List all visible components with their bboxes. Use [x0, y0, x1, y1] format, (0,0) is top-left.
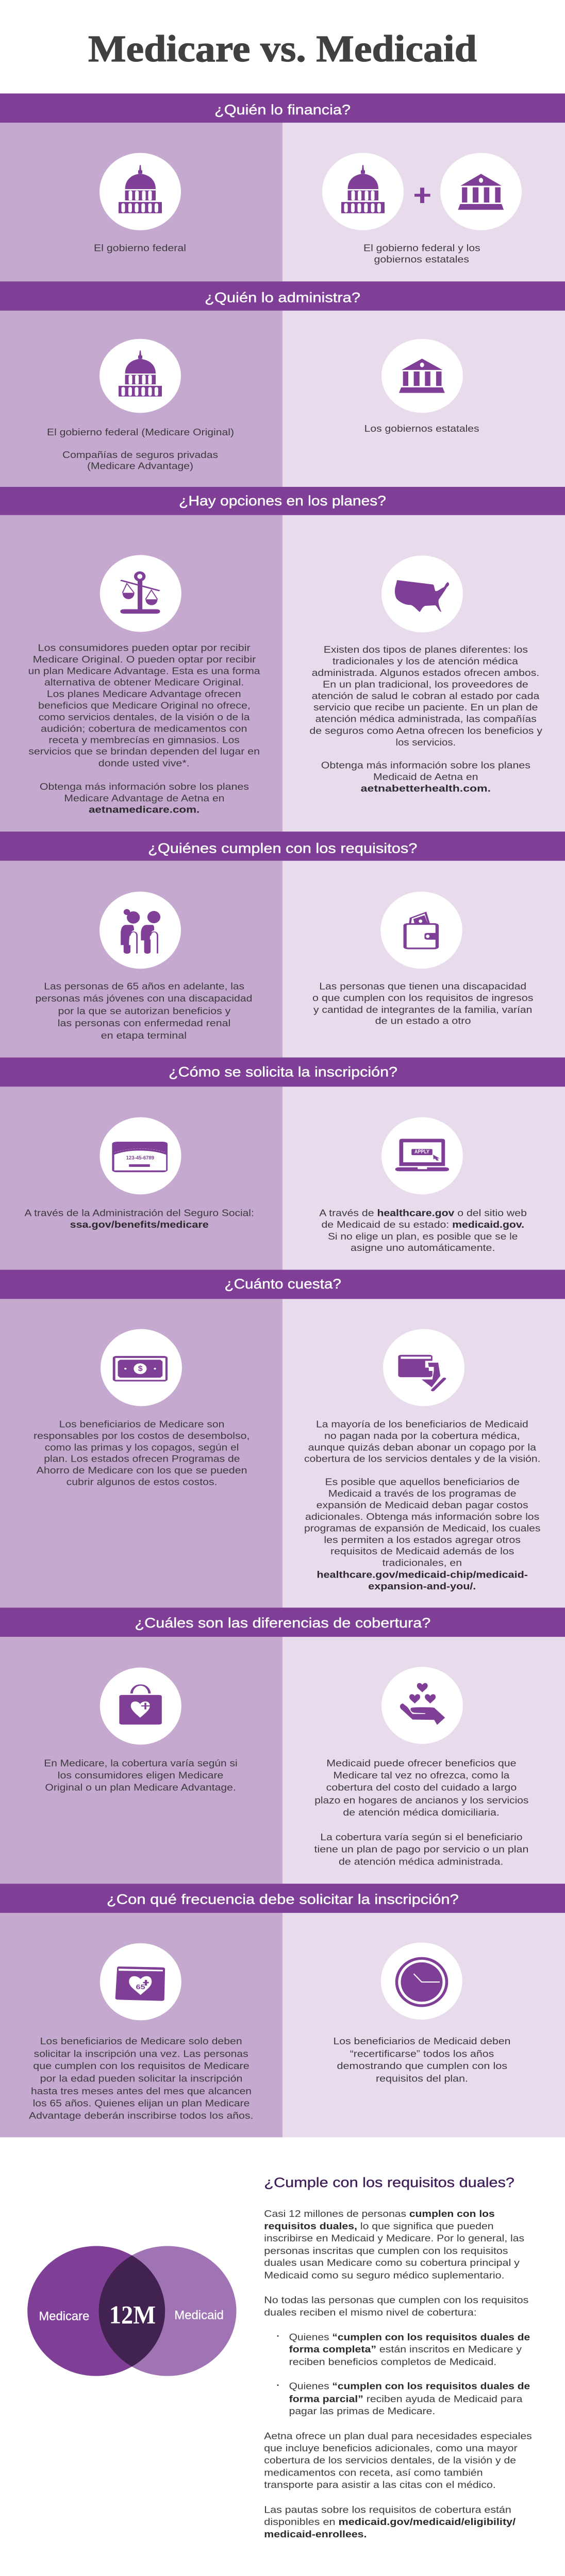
panel: Medicaid enrollment frequency: [282, 1913, 565, 2138]
chart: Venn diagram of dual eligibility: Medicare: [39, 2310, 89, 2324]
panel: Medicare enrollment: [0, 1087, 282, 1270]
text: Medicare coverage description: Original o un plan Medicare Advantage.: [45, 1783, 236, 1793]
panel: Medicaid eligibility: [282, 861, 565, 1058]
icon: wallet in hand: [383, 1329, 464, 1406]
text: Medicaid frequency description: Los beneficiarios de Medicaid deben: [333, 2037, 510, 2047]
text: Medicare eligibility description: por la que se autorizan beneficios y: [58, 1006, 231, 1016]
heading bar: ¿Cuáles son las diferencias de cobertura?: [135, 1615, 430, 1631]
text: Medicaid plan options description: de seguros como Aetna ofrecen los beneficios y: [309, 726, 543, 736]
icon: capitol on right: [322, 153, 404, 230]
text: Medicare enrollment description: ssa.gov/benefits/medicare: [70, 1219, 209, 1230]
text: Medicaid cost description: La mayoría de los beneficiarios de Medicaid: [316, 1419, 528, 1430]
heading bar: ¿Con qué frecuencia debe solicitar la inscripción?: [107, 1891, 459, 1907]
text: Medicare frequency description: que cumplen con los requisitos de Medicare: [33, 2061, 250, 2072]
icon: United States map: [381, 555, 463, 633]
text: dual eligibility body: [264, 2209, 532, 2540]
text: Medicaid plan options description: administrada. Algunos estados ofrecen ambos.: [312, 668, 539, 679]
icon: capitol: [99, 153, 181, 230]
section: ¿Cuánto cuesta?: [0, 1270, 565, 1607]
text: dual eligibility body: disponibles en medicaid.gov/medicaid/eligibility/: [264, 2517, 516, 2528]
text: federal and state governments: [363, 243, 480, 265]
text: Medicare cost description: [34, 1419, 250, 1487]
text: Medicare eligibility description: las personas con enfermedad renal: [58, 1019, 230, 1029]
text: Medicaid plan options description: Obtenga más información sobre los planes: [321, 760, 530, 771]
heading bar: [0, 1058, 565, 1087]
text: dual eligibility body: que incluye beneficios adicionales, como una mayor: [264, 2443, 518, 2454]
section: ¿Quién lo administra?: [0, 281, 565, 487]
text: Medicare cost description: cubrir algunos de estos costos.: [67, 1477, 217, 1487]
text: Medicaid coverage description: tiene un plan de pago por servicio o un plan: [314, 1844, 528, 1855]
text: Medicare frequency description: Advantage deberán inscribirse todos los años.: [29, 2111, 253, 2121]
text: Medicaid cost description: requisitos de Medicaid además de los: [330, 1547, 514, 1557]
icon: balance scale: [100, 555, 181, 632]
panel: Medicaid plan options: [282, 515, 565, 832]
icon: dollar bill: [101, 1329, 182, 1406]
text: who administers Medicare: [47, 427, 234, 471]
text: Medicare plan options description: beneficios que Medicare Original no ofrece,: [38, 701, 251, 711]
text: Medicare cost description: responsables por los costos de desembolso,: [34, 1431, 250, 1442]
text: Medicare plan options description: como servicios dentales, de la visión o de la: [39, 712, 250, 723]
text: Medicaid cost description: expansion-and-you/.: [368, 1581, 476, 1592]
heading bar: ¿Cómo se solicita la inscripción?: [169, 1064, 397, 1079]
icon: clock: [381, 1942, 462, 2020]
text: Medicaid enrollment description: asigne uno automáticamente.: [351, 1243, 495, 1253]
text: Medicaid enrollment description: Si no elige un plan, es posible que se le: [328, 1231, 518, 1242]
text: Medicaid coverage description: [314, 1758, 528, 1867]
text: state governments: Los gobiernos estatales: [364, 424, 479, 434]
panel: Medicare plan options: [0, 515, 282, 832]
icon: laptop with apply button: APPLY: [414, 1149, 429, 1155]
section: ¿Con qué frecuencia debe solicitar la inscripción?: [0, 1884, 565, 2138]
text: Medicaid plan options description: servicio que recibe un paciente. En un plan de: [313, 703, 538, 713]
heading bar: ¿Hay opciones en los planes?: [179, 493, 386, 509]
text: Medicaid cost description: no pagan nada por la cobertura médica,: [324, 1431, 520, 1442]
icon: state building: [440, 153, 522, 230]
chart: Venn diagram of dual eligibility: Medicaid: [174, 2309, 224, 2322]
panel: Medicare administration: [0, 311, 282, 487]
text: Medicaid plan options description: Existen dos tipos de planes diferentes: los: [324, 645, 528, 655]
text: Medicare eligibility description: en etapa terminal: [101, 1030, 187, 1041]
bullet: full dual eligibility: forma completa” están inscritos en Medicare y: [289, 2345, 522, 2355]
text: Medicaid cost description: Es posible que aquellos beneficiarios de: [325, 1477, 520, 1487]
icon: medical bag: [100, 1668, 181, 1744]
section: ¿Cómo se solicita la inscripción?: [0, 1058, 565, 1270]
icon: dollar bill: $: [138, 1364, 143, 1373]
section: ¿Quién lo financia?: [0, 93, 565, 281]
panel: Medicaid financing: [282, 123, 565, 281]
text: federal government: El gobierno federal: [94, 243, 186, 253]
heading bar: [0, 281, 565, 311]
text: dual eligibility body: Medicaid como su seguro médico suplementario.: [264, 2270, 504, 2281]
text: Medicare plan options description: audición; cobertura de medicamentos con: [41, 724, 247, 734]
text: Medicaid cost description: aunque quizás deban abonar un copago por la: [308, 1443, 537, 1453]
text: dual eligibility body: medicaid-enrollees.: [264, 2529, 367, 2540]
text: Medicaid plan options description: En un plan tradicional, los proveedores de: [323, 680, 528, 690]
icon: older couple: [99, 892, 181, 969]
text: Medicare frequency description: [29, 2037, 253, 2121]
text: Medicaid coverage description: plazo en hogares de ancianos y los servicios: [314, 1795, 528, 1806]
heading bar: ¿Quién lo financia?: [214, 102, 351, 117]
text: dual eligibility body: duales usan Medicare como su cobertura principal y: [264, 2258, 520, 2268]
text: Medicaid eligibility description: Las personas que tienen una discapacidad: [319, 981, 526, 992]
text: Medicaid enrollment description: de Medicaid de su estado: medicaid.gov.: [322, 1219, 524, 1230]
icon: wallet with bills: [380, 892, 462, 969]
text: federal and state governments: El gobierno federal y los: [363, 243, 480, 253]
chart: Venn diagram of dual eligibility: [27, 2246, 236, 2376]
text: federal and state governments: gobiernos estatales: [374, 255, 469, 265]
text: Medicaid eligibility description: o que cumplen con los requisitos de ingresos: [312, 993, 533, 1004]
section: ¿Hay opciones en los planes?: [0, 487, 565, 832]
icon: state building: [381, 339, 463, 413]
text: dual eligibility body: Las pautas sobre los requisitos de cobertura están: [264, 2505, 511, 2515]
panel: Medicare financing: [0, 123, 282, 281]
text: Medicaid cost description: adicionales. Obtenga más información sobre los: [305, 1512, 539, 1522]
text: Medicare eligibility description: Las personas de 65 años en adelante, las: [44, 981, 244, 992]
text: Medicaid cost description: expansión de Medicaid deban pagar costos: [317, 1500, 528, 1511]
text: Medicaid enrollment description: A través de healthcare.gov o del sitio web: [319, 1208, 527, 1218]
text: Medicaid coverage description: cobertura del costo del cuidado a largo: [326, 1783, 517, 1793]
text: dual eligibility body: requisitos duales, lo que significa que pueden: [264, 2221, 494, 2232]
text: Medicaid cost description: les permiten a los estados agregar otros: [324, 1535, 521, 1546]
text: Medicare enrollment description: [24, 1208, 254, 1230]
text: Medicaid coverage description: de atención médica domiciliaria.: [343, 1807, 500, 1818]
text: Medicaid coverage description: Medicaid puede ofrecer beneficios que: [326, 1758, 517, 1769]
panel: Medicaid enrollment: [282, 1087, 565, 1270]
text: dual eligibility body: duales reciben el mismo nivel de cobertura:: [264, 2308, 477, 2318]
title: Medicare vs. Medicaid: [88, 28, 477, 70]
panel: Medicare coverage: [0, 1637, 282, 1884]
text: Medicaid plan options description: Medicaid de Aetna en: [373, 772, 478, 783]
text: Medicaid plan options description: [309, 645, 543, 794]
text: Medicaid cost description: tradicionales, en: [383, 1558, 462, 1569]
text: Medicare plan options description: Los planes Medicare Advantage ofrecen: [47, 689, 241, 700]
text: Medicaid coverage description: Medicare tal vez no ofrezca, como la: [333, 1771, 510, 1781]
icon: laptop with apply button: [381, 1117, 463, 1194]
text: Medicaid coverage description: La cobertura varía según si el beneficiario: [320, 1832, 522, 1843]
text: Medicare frequency description: Los beneficiarios de Medicare solo deben: [40, 2037, 242, 2047]
heading bar: ¿Quiénes cumplen con los requisitos?: [148, 840, 417, 856]
text: Medicaid eligibility description: [312, 981, 533, 1027]
text: Medicare cost description: Los beneficiarios de Medicare son: [59, 1419, 224, 1430]
text: Medicare eligibility description: [35, 981, 252, 1041]
icon: calendar with heart 65+: [100, 1943, 181, 2020]
text: dual eligibility body: personas inscritas que cumplen con los requisitos: [264, 2246, 508, 2257]
text: Medicaid eligibility description: y cantidad de integrantes de la familia, varían: [313, 1005, 532, 1015]
bullet: partial dual eligibility: forma parcial” reciben ayuda de Medicaid para: [289, 2394, 523, 2404]
text: Medicaid cost description: healthcare.gov/medicaid-chip/medicaid-: [317, 1570, 528, 1580]
text: Medicare eligibility description: personas más jóvenes con una discapacidad: [35, 993, 252, 1004]
text: Medicaid cost description: cobertura de los servicios dentales y de la visión.: [304, 1454, 540, 1464]
bullet: partial dual eligibility: [277, 2381, 530, 2417]
text: Medicaid frequency description: [333, 2037, 510, 2084]
text: Medicaid plan options description: atención médica administrada, las compañías: [315, 714, 537, 724]
text: Medicare frequency description: solicitar la inscripción una vez. Las personas: [34, 2049, 248, 2059]
text: Medicare plan options description: alternativa de obtener Medicare Original.: [44, 677, 244, 688]
icon: calendar with heart 65+: 65: [136, 1983, 145, 1991]
heading bar: [0, 1607, 565, 1637]
heading bar: [0, 832, 565, 861]
text: dual eligibility body: Aetna ofrece un plan dual para necesidades especiales: [264, 2431, 532, 2442]
text: Medicare plan options description: aetnamedicare.com.: [89, 805, 200, 816]
chart: Venn diagram of dual eligibility: 12M: [109, 2301, 156, 2329]
icon: plus sign: [414, 188, 430, 203]
bullet: partial dual eligibility: pagar las primas de Medicare.: [289, 2406, 435, 2417]
text: dual eligibility body: transporte para asistir a las citas con el médico.: [264, 2480, 496, 2490]
text: Medicare plan options description: Medicare Advantage de Aetna en: [64, 793, 225, 804]
panel: Medicare cost: [0, 1299, 282, 1607]
text: dual eligibility body: No todas las personas que cumplen con los requisitos: [264, 2295, 528, 2306]
bullet: partial dual eligibility: Quienes “cumplen con los requisitos duales de: [289, 2381, 530, 2392]
text: Medicare coverage description: [44, 1758, 238, 1793]
text: dual eligibility body: cobertura de los servicios dentales, de la visión y de: [264, 2455, 516, 2466]
section: ¿Quiénes cumplen con los requisitos?: [0, 832, 565, 1058]
heading bar: ¿Quién lo administra?: [205, 290, 360, 305]
text: Medicare enrollment description: A través de la Administración del Seguro Social:: [24, 1208, 254, 1218]
text: dual eligibility body: medicamentos con receta, así como también: [264, 2468, 483, 2478]
bullet: full dual eligibility: reciben beneficios completos de Medicaid.: [289, 2357, 496, 2367]
text: dual eligibility body: Casi 12 millones de personas cumplen con los: [264, 2209, 495, 2219]
heading bar: [0, 1270, 565, 1299]
text: Medicaid frequency description: demostrando que cumplen con los: [337, 2061, 507, 2072]
heading: dual eligibility: ¿Cumple con los requisitos duales?: [264, 2175, 514, 2190]
text: Medicare plan options description: receta y membrecías en gimnasios. Los: [48, 735, 240, 745]
text: Medicaid frequency description: “recertificarse” todos los años: [350, 2049, 494, 2059]
bullet: full dual eligibility: [277, 2332, 530, 2367]
section: ¿Cuáles son las diferencias de cobertura?: [0, 1607, 565, 1884]
text: who administers Medicare: (Medicare Advantage): [87, 461, 193, 471]
text: Medicaid cost description: Medicaid a través de los programas de: [328, 1489, 517, 1499]
heading bar: ¿Cuánto cuesta?: [224, 1276, 341, 1292]
panel: Medicaid cost: [282, 1299, 565, 1607]
text: who administers Medicare: El gobierno federal (Medicare Original): [47, 427, 234, 438]
text: Medicare frequency description: hasta tres meses antes del mes que alcancen: [31, 2086, 252, 2097]
text: Medicare plan options description: Los consumidores pueden optar por recibir: [38, 643, 251, 653]
text: Medicare coverage description: En Medicare, la cobertura varía según si: [44, 1758, 238, 1769]
text: Medicaid plan options description: los servicios.: [395, 737, 456, 748]
text: Medicare plan options description: Obtenga más información sobre los planes: [40, 782, 249, 792]
panel: Medicare enrollment frequency: [0, 1913, 282, 2138]
text: Medicaid plan options description: atención de salud le cobran al estado por cada: [312, 691, 540, 702]
text: Medicare plan options description: servicios que se brindan dependen del lugar en: [28, 747, 260, 757]
heading bar: [0, 487, 565, 515]
text: Medicaid cost description: [304, 1419, 540, 1592]
heading bar: [0, 93, 565, 123]
text: Medicare cost description: plan. Los estados ofrecen Programas de: [44, 1454, 240, 1464]
text: Medicaid enrollment description: [319, 1208, 527, 1253]
text: Medicaid cost description: programas de expansión de Medicaid, los cuales: [304, 1523, 540, 1534]
panel: Medicare eligibility: [0, 861, 282, 1058]
text: Medicare cost description: Ahorro de Medicare con los que se pueden: [37, 1466, 247, 1476]
text: who administers Medicare: Compañías de seguros privadas: [62, 450, 218, 461]
heading bar: [0, 1884, 565, 1913]
text: Medicare frequency description: por la edad pueden solicitar la inscripción: [40, 2074, 242, 2084]
text: dual eligibility body: inscribirse en Medicaid y Medicare. Por lo general, las: [264, 2233, 524, 2244]
icon: hand with hearts: [381, 1667, 463, 1744]
text: Medicare plan options description: un plan Medicare Advantage. Esta es una forma: [28, 666, 260, 676]
text: Medicaid eligibility description: de un estado a otro: [375, 1016, 471, 1027]
text: Medicare frequency description: los 65 años. Quienes elijan un plan Medicare: [33, 2098, 250, 2109]
text: Medicaid plan options description: aetnabetterhealth.com.: [361, 784, 491, 794]
bullet: full dual eligibility: Quienes “cumplen con los requisitos duales de: [289, 2332, 530, 2343]
icon: capitol: [99, 339, 181, 413]
icon: social security card: [100, 1117, 181, 1194]
text: Medicaid plan options description: tradicionales y los de atención médica: [333, 656, 519, 667]
text: Medicare plan options description: Medicare Original. O pueden optar por recibir: [33, 654, 256, 665]
text: Medicaid coverage description: de atención médica administrada.: [339, 1857, 503, 1867]
panel: Medicaid administration: [282, 311, 565, 487]
text: Medicare plan options description: [28, 643, 260, 816]
panel: Medicaid coverage: [282, 1637, 565, 1884]
text: Medicaid frequency description: requisitos del plan.: [376, 2074, 468, 2084]
icon: social security card: 123-45-6789: [126, 1156, 154, 1161]
text: Medicare cost description: como las primas y los copagos, según el: [45, 1443, 239, 1453]
text: Medicare plan options description: donde usted vive*.: [98, 758, 190, 769]
text: Medicare coverage description: los consumidores eligen Medicare: [58, 1771, 223, 1781]
